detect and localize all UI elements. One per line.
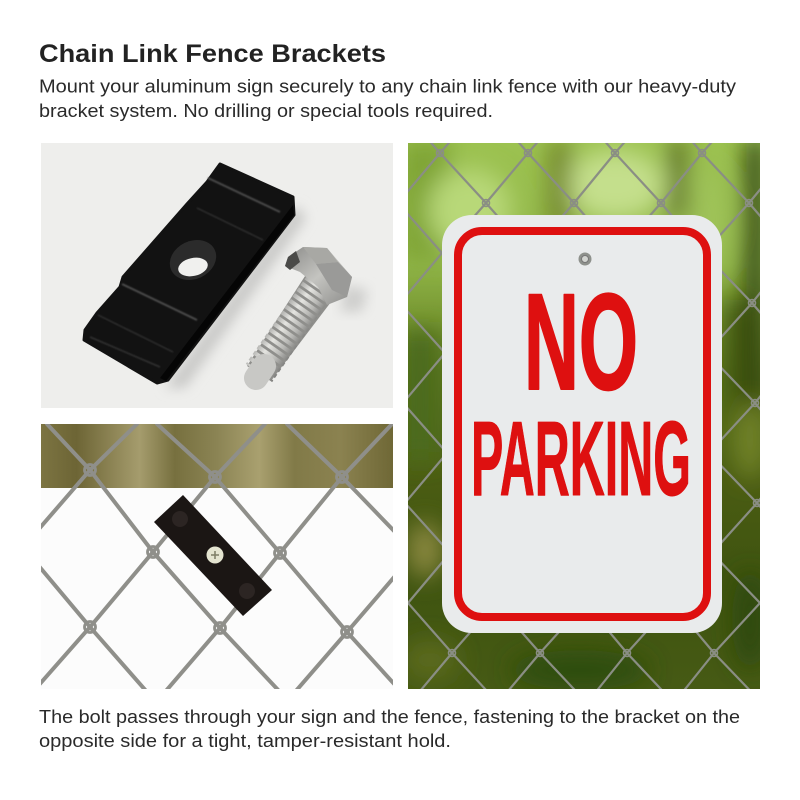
title: Chain Link Fence Brackets: [39, 40, 386, 68]
panel: no parking sign on fence photo: [408, 143, 760, 689]
panel: bracket mounted on fence photo: [38, 424, 396, 692]
intro text: Mount your aluminum sign securely to any chain link fence with our heavy-duty: [39, 76, 737, 96]
panel: bracket and bolt photo: [41, 143, 393, 408]
intro text: [39, 76, 737, 121]
icon: steel bolt: [247, 247, 352, 381]
caption text: The bolt passes through your sign and the fence, fastening to the bracket on the: [39, 706, 740, 727]
no parking sign: [442, 215, 722, 633]
chain link wires: [408, 143, 760, 689]
bracket threaded hole: [170, 240, 216, 280]
icon: black bracket: [84, 164, 294, 383]
icon: mounted bracket: [154, 495, 272, 616]
sign word NO: NO: [524, 266, 638, 419]
intro text: bracket system. No drilling or special tools required.: [39, 100, 493, 121]
bracket shadow: [165, 205, 306, 388]
sign mounting bolt: [578, 252, 592, 266]
chain link wires: [38, 424, 396, 692]
bolt shadow: [340, 285, 368, 312]
caption text: [39, 706, 740, 751]
caption text: opposite side for a tight, tamper-resistant hold.: [39, 730, 451, 751]
